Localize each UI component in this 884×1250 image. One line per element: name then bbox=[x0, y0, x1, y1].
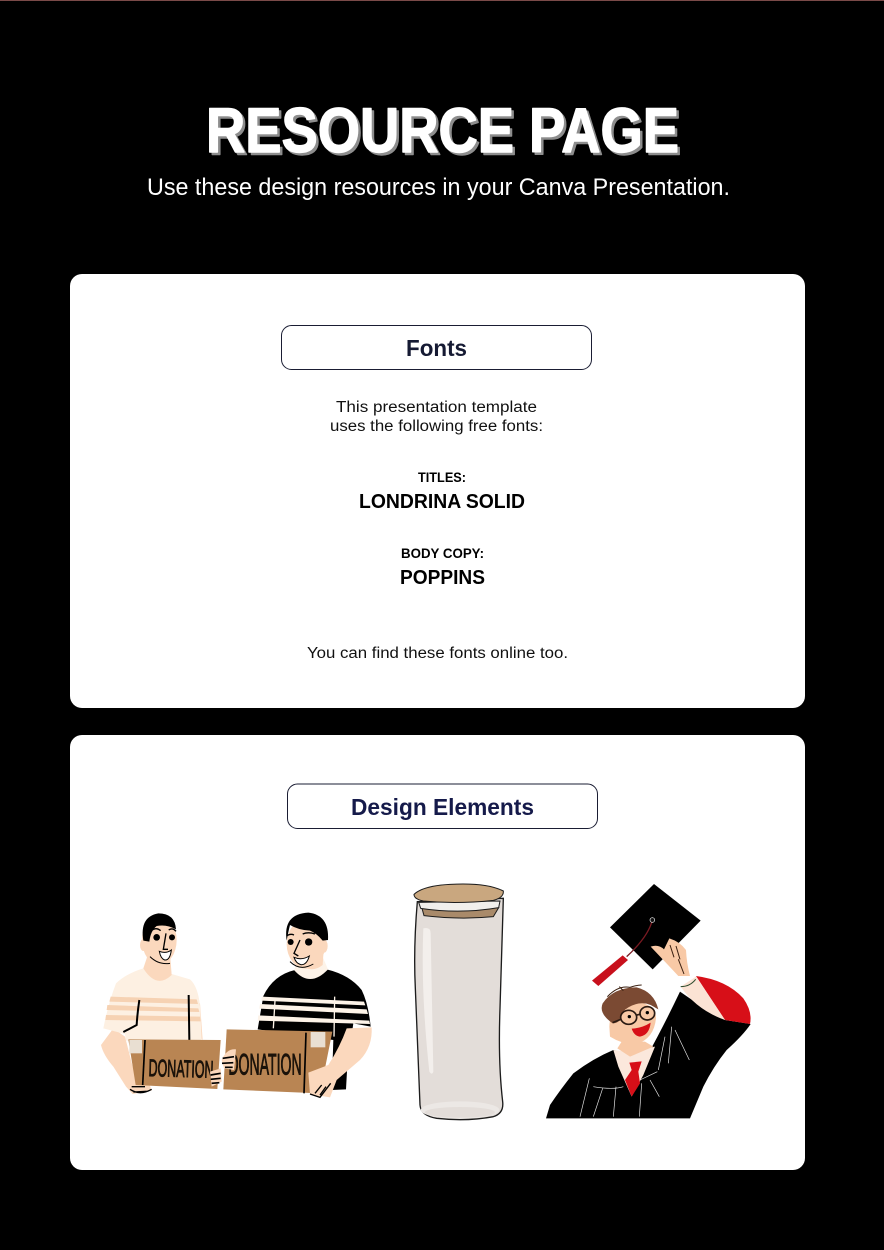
collar and tie bbox=[613, 1047, 655, 1097]
red sleeve bbox=[696, 976, 751, 1024]
text block: intro: uses the following free fonts: bbox=[330, 418, 543, 435]
text block: closing note: You can find these fonts online too. bbox=[307, 645, 568, 662]
text block: titles font: LONDRINA SOLID bbox=[359, 491, 525, 513]
gown bbox=[546, 992, 751, 1118]
heading: design elements bbox=[288, 784, 598, 828]
donation box right: DONATION bbox=[228, 1048, 302, 1081]
graduation cap bbox=[592, 884, 701, 986]
heading: design elements: Design Elements bbox=[351, 794, 534, 820]
text block: body font bbox=[400, 546, 485, 589]
text block: titles font bbox=[359, 470, 525, 513]
jar lid bbox=[414, 884, 503, 918]
text block: intro: This presentation template bbox=[336, 399, 537, 416]
illustration: glass jar bbox=[414, 884, 503, 1120]
subtitle: Use these design resources in your Canva Presentation. bbox=[147, 174, 730, 201]
illustration: two men holding donation boxes bbox=[101, 913, 372, 1097]
text block: intro bbox=[330, 399, 543, 435]
graduate head bbox=[602, 985, 658, 1057]
man with black shirt bbox=[258, 913, 372, 1097]
donation box left bbox=[128, 1039, 222, 1093]
gown folds bbox=[580, 1027, 689, 1117]
jar highlights bbox=[421, 928, 499, 1119]
heading: fonts bbox=[282, 326, 592, 370]
text block: body font: POPPINS bbox=[400, 567, 485, 589]
title: RESOURCE PAGE bbox=[206, 96, 679, 166]
panel: fonts bbox=[70, 274, 805, 708]
donation box right bbox=[222, 1029, 332, 1097]
illustration: graduate with cap bbox=[546, 884, 751, 1118]
text block: body font: BODY COPY: bbox=[401, 546, 484, 561]
forearm bbox=[681, 977, 725, 1020]
panel: design elements bbox=[70, 735, 805, 1170]
jar body bbox=[415, 898, 503, 1120]
donation box left: DONATION bbox=[148, 1055, 214, 1084]
heading: fonts: Fonts bbox=[406, 335, 467, 361]
title: RESOURCE PAGE bbox=[208, 98, 682, 168]
text block: titles font: TITLES: bbox=[418, 470, 466, 485]
glasses bbox=[613, 1007, 655, 1024]
raised hand bbox=[651, 938, 690, 976]
man with cream shirt bbox=[101, 913, 203, 1094]
